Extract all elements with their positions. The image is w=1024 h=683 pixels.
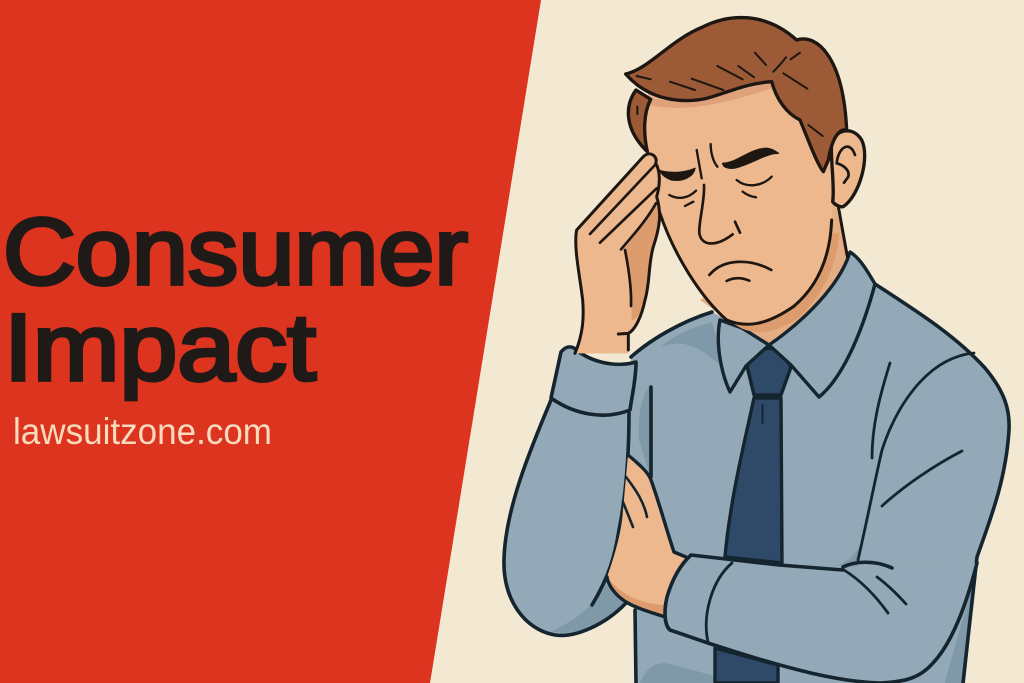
frowning mouth: [709, 262, 771, 281]
necktie: [715, 348, 791, 683]
shirt folds: [858, 353, 974, 560]
neck: [700, 200, 848, 345]
eyebrows: [660, 148, 778, 180]
jaw line: [660, 207, 847, 324]
lower hand under arm: [607, 455, 686, 617]
title: Consumer: [3, 199, 468, 305]
ear inner: [837, 147, 855, 183]
hair strands: [637, 53, 823, 136]
face: [645, 73, 847, 324]
illustration: stressed man: [504, 18, 1009, 683]
hair: [626, 18, 847, 172]
forehead shadow: [651, 85, 770, 104]
finger lines: [590, 165, 657, 306]
palm shadow: [625, 200, 660, 320]
chin shadow: [727, 233, 839, 332]
head: [575, 18, 865, 353]
folded right arm: [665, 555, 977, 683]
left sleeve and cuff: [504, 347, 636, 635]
hand outline: [575, 154, 660, 353]
panel: red slanted title panel: [0, 0, 541, 683]
nose: [699, 185, 740, 243]
shirt collar: [718, 252, 875, 397]
side hair: [628, 90, 651, 152]
shirt outline: [631, 284, 1009, 683]
closed eyes and wrinkles: [669, 144, 772, 206]
ear: [831, 131, 865, 207]
website text: lawsuitzone.com: [13, 411, 272, 452]
raised hand: [575, 154, 660, 353]
shirt torso: [626, 252, 1009, 683]
title: Impact: [4, 295, 316, 401]
title: [3, 199, 468, 401]
shirt shadows: [639, 322, 977, 683]
